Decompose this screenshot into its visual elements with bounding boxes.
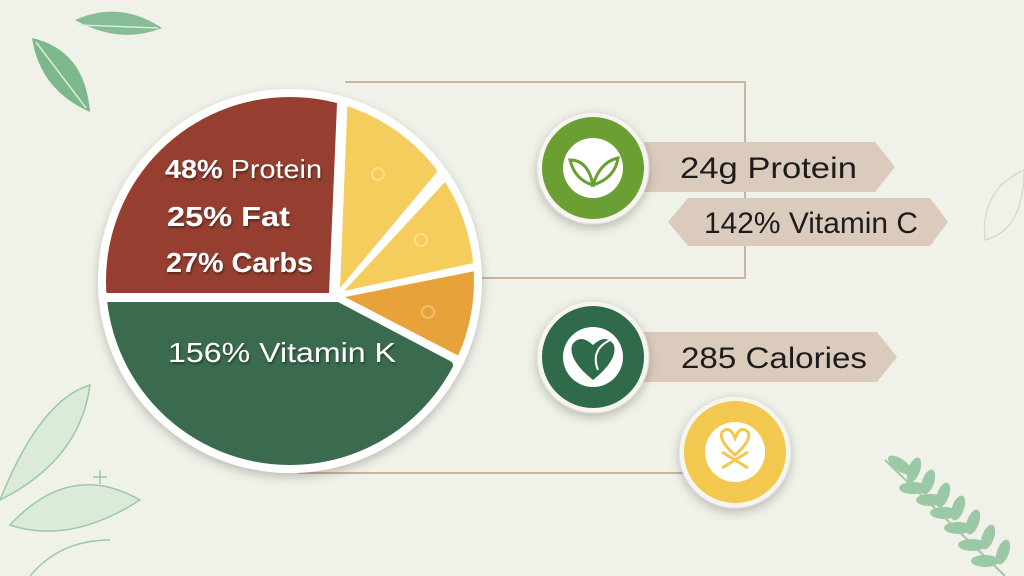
pie labels: 27% Carbs [166,247,313,278]
banner: 285 Calories: 285 Calories [681,342,867,375]
decoration: right faint leaf [984,170,1024,240]
banner: 24g Protein [640,142,895,192]
pie labels: 156% Vitamin K [168,337,396,368]
slice: orange [345,271,474,355]
pie labels: 25% Fat [167,201,290,232]
banner: 24g Protein: 24g Protein [680,152,857,185]
pie chart [90,80,500,500]
decoration: top-left leaves [32,12,162,112]
banner: 285 Calories [640,332,897,382]
slice: yellow 1 [340,106,438,288]
slice: red macros [106,97,337,293]
pie labels [165,154,396,368]
banner: 142% Vitamin C [668,198,948,246]
decoration: bottom-right fern [885,452,1013,576]
connector lines [298,82,745,473]
pie labels: 48% Protein [165,154,322,184]
icon: heart grain (yellow) [679,396,791,508]
icon: leaves (green) [537,112,649,224]
decoration: bottom-left leaves [0,385,140,576]
banner: 142% Vitamin C: 142% Vitamin C [704,207,918,240]
slice: yellow 2 [344,182,474,291]
icon: heart leaf (dark green) [537,301,649,413]
slice: green vitamin K [107,302,454,465]
